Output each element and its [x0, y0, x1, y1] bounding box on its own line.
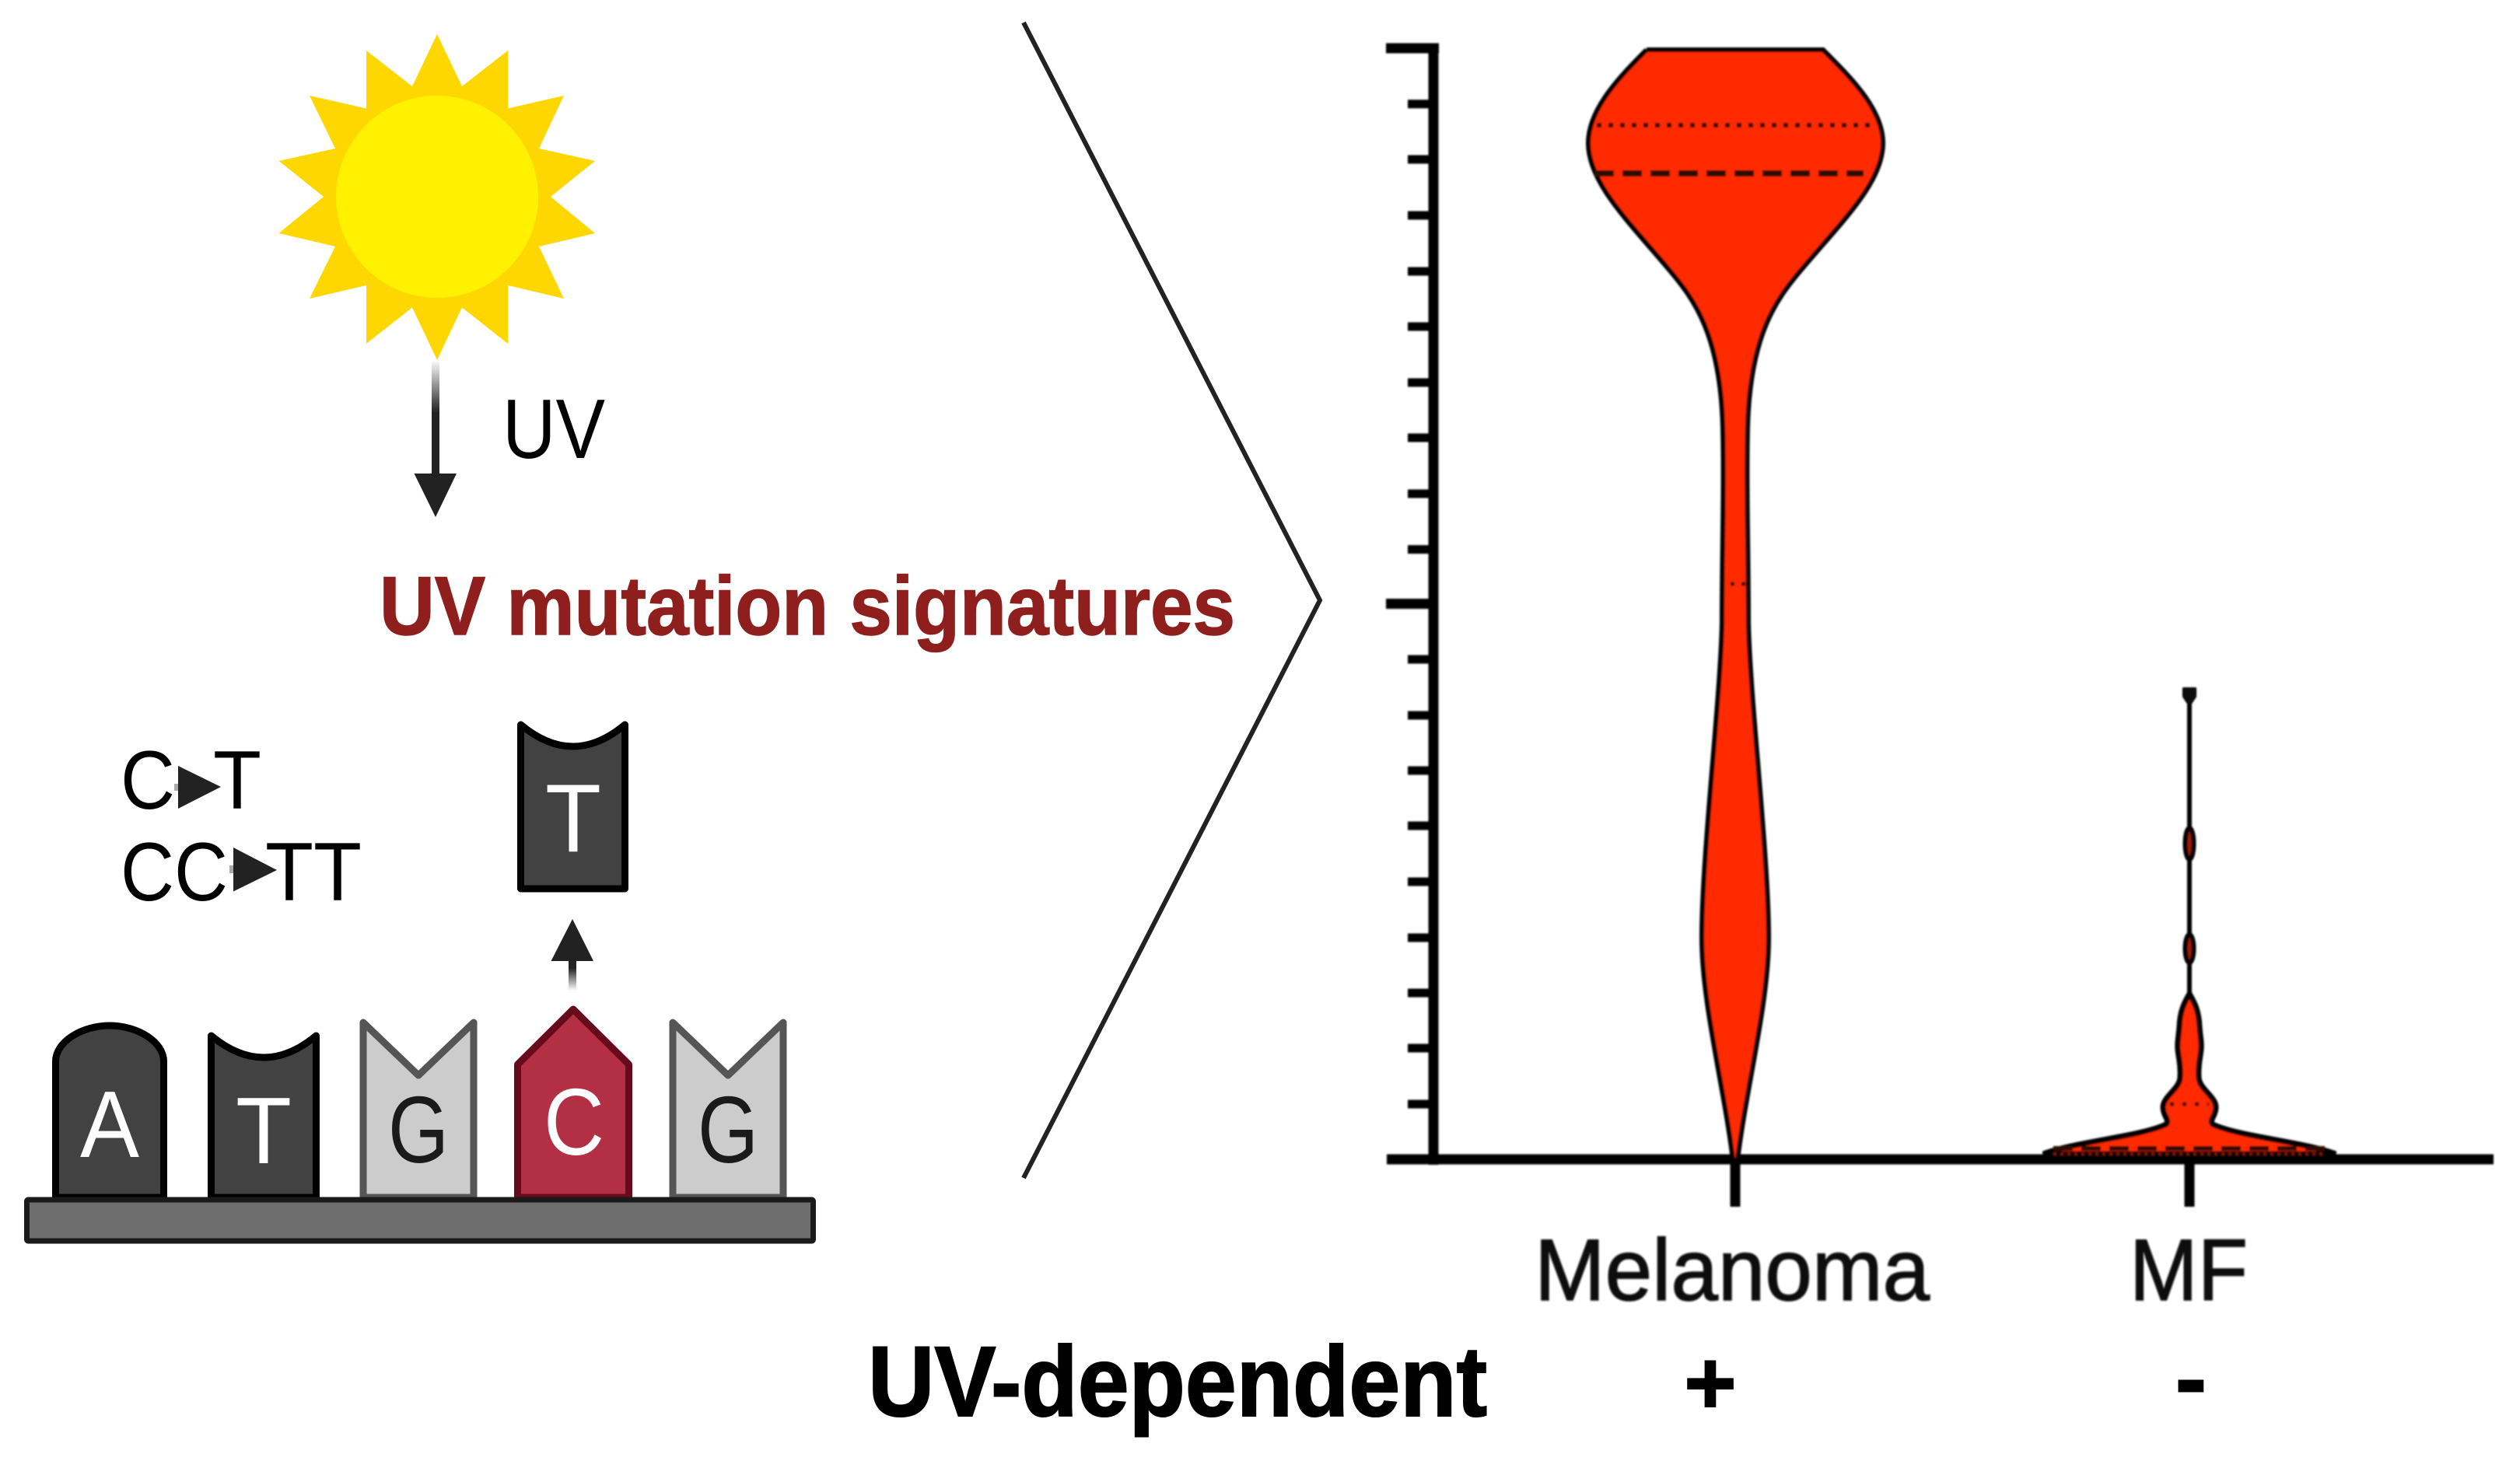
tile: detached T base: T [545, 765, 601, 872]
tile: T: T [236, 1078, 292, 1183]
tile: G: G [698, 1077, 758, 1183]
tile: G [673, 1022, 783, 1197]
text: C to T [121, 733, 261, 827]
tile: C (mutated): C [544, 1069, 604, 1175]
text: CC to TT: CC [121, 825, 228, 918]
tile: C (mutated) [518, 1009, 628, 1197]
arrow: UV down from sun [414, 360, 457, 517]
arrow: T excised upward [551, 919, 593, 991]
tile: A: A [80, 1071, 140, 1177]
tile: T [212, 1036, 316, 1197]
icon: sun [278, 34, 595, 360]
heading: UV mutation signatures: UV mutation signatures [380, 559, 1235, 652]
violin chart [1386, 44, 2494, 1319]
DNA strand [26, 1009, 814, 1241]
text: C to T: T [213, 733, 261, 827]
text: C to T: C [121, 733, 175, 827]
sign: minus: - [2175, 1324, 2207, 1432]
tile: A [56, 1026, 163, 1197]
text: CC to TT [121, 825, 362, 918]
violin: MF [2043, 688, 2336, 1154]
violin: melanoma [1588, 50, 1883, 1160]
DNA backbone [26, 1200, 814, 1241]
row label: UV-dependent: UV-dependent [868, 1326, 1487, 1438]
tile: G [363, 1022, 474, 1197]
tile: G: G [388, 1077, 449, 1183]
chevron divider [1024, 23, 1320, 1178]
sign: plus: + [1684, 1333, 1737, 1433]
x label: Melanoma: Melanoma [1535, 1222, 1930, 1319]
label: UV: UV [502, 382, 605, 477]
text: CC to TT: TT [265, 825, 362, 918]
chart axes and ticks [1386, 44, 2494, 1207]
x label: MF: MF [2130, 1222, 2248, 1319]
tile: detached T base [521, 725, 625, 889]
